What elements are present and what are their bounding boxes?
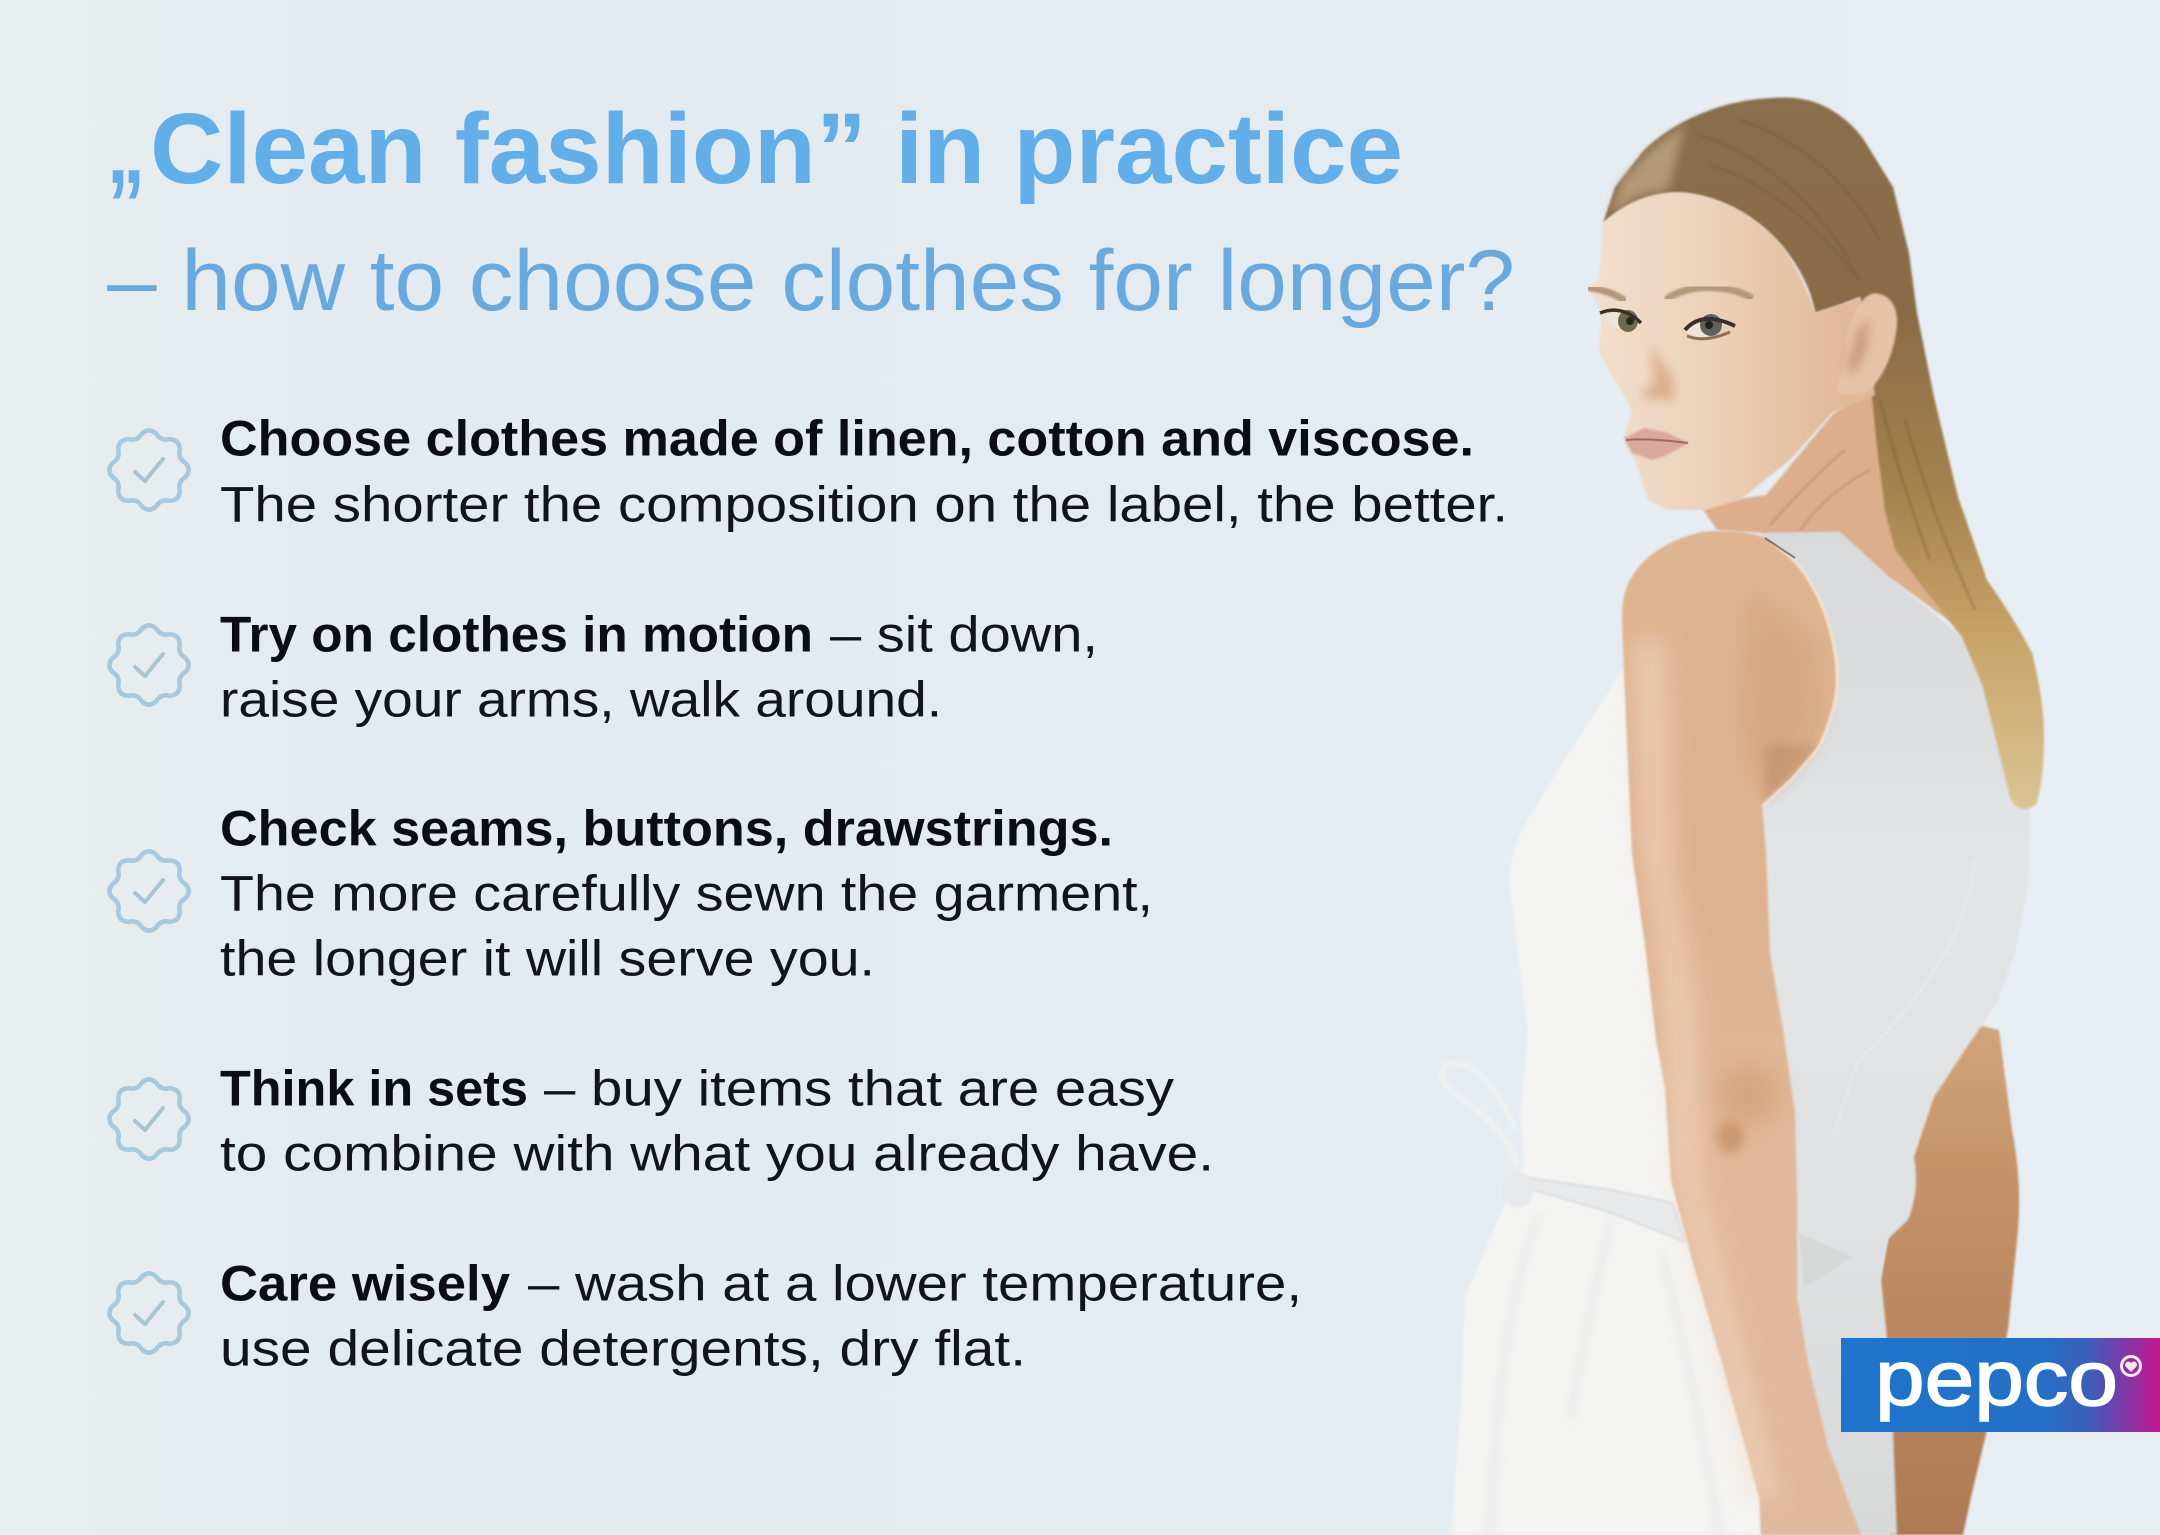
title: – how to choose clothes for longer? — [107, 233, 1515, 329]
logo: pepco: pepco — [1875, 1334, 2118, 1422]
icon: check badge 2 — [109, 625, 189, 705]
tip 3: Check seams, buttons, drawstrings. — [220, 800, 1113, 856]
mouth line — [1626, 439, 1688, 443]
tip 5: – wash at a lower temperature, — [528, 1256, 1302, 1312]
belt loop — [1442, 1063, 1518, 1165]
tip 5: Care wisely — [220, 1256, 510, 1312]
belt knot — [1503, 1172, 1533, 1208]
dress front panel — [1451, 670, 1770, 1535]
waist belt — [1522, 1177, 1685, 1242]
dress back seam — [1835, 860, 1975, 1130]
face — [1589, 193, 1875, 510]
tip 2 — [109, 606, 1098, 728]
right eye — [1685, 314, 1735, 339]
tip 3: The more carefully sewn the garment, — [220, 866, 1153, 922]
right arm — [1880, 1025, 2019, 1535]
right eyebrow — [1668, 287, 1750, 298]
dress back panel — [1700, 532, 2030, 1535]
title: „ — [107, 93, 145, 205]
tip 3 — [109, 800, 1153, 986]
tip 2: Try on clothes in motion — [220, 606, 813, 662]
title — [107, 93, 1515, 329]
tip 4: – buy items that are easy — [544, 1060, 1174, 1116]
arm shade — [1740, 590, 1820, 790]
neck tendon shadows — [1770, 450, 1870, 530]
tip 1: The shorter the composition on the label, the better. — [220, 476, 1508, 532]
tip 5 — [109, 1256, 1302, 1376]
icon: check badge 4 — [109, 1079, 189, 1159]
logo heart mark — [2122, 1356, 2140, 1376]
tip 5: use delicate detergents, dry flat. — [220, 1320, 1026, 1376]
icon: check badge 5 — [109, 1273, 189, 1353]
left eye — [1600, 310, 1641, 332]
hair — [1603, 97, 2044, 809]
left eyebrow — [1590, 288, 1624, 300]
front arm — [1622, 531, 1861, 1535]
icon: check badge 3 — [109, 851, 189, 931]
lips — [1624, 428, 1689, 460]
tip 4: to combine with what you already have. — [220, 1126, 1214, 1182]
elbow wrinkle — [1716, 1121, 1744, 1153]
logo: pepco — [1841, 1334, 2160, 1432]
tip 2: raise your arms, walk around. — [220, 672, 942, 728]
tip 2: – sit down, — [830, 606, 1098, 662]
neck — [1700, 385, 1962, 630]
nose shadow — [1640, 345, 1675, 400]
armpit shadow — [1764, 745, 1818, 803]
illustration: woman in white linen dress — [1442, 97, 2044, 1535]
hair front lock highlight — [1610, 125, 1685, 215]
armhole piping — [1763, 545, 1837, 806]
tip 1 — [109, 410, 1508, 532]
skirt folds — [1490, 1215, 1720, 1535]
dress back folded tie — [1799, 1233, 1852, 1287]
ear inner shadow — [1846, 318, 1870, 372]
strap dark edge — [1765, 538, 1795, 558]
hair strands — [1700, 120, 1975, 610]
tip 3: the longer it will serve you. — [220, 930, 875, 986]
arm highlight — [1632, 640, 1780, 1500]
ear — [1836, 293, 1897, 395]
tip 4: Think in sets — [220, 1060, 528, 1116]
tip 4 — [109, 1060, 1214, 1182]
elbow shading — [1718, 1065, 1778, 1125]
icon: check badge 1 — [109, 430, 189, 510]
title: Clean fashion” in practice — [150, 93, 1403, 205]
tip 1: Choose clothes made of linen, cotton and viscose. — [220, 410, 1474, 466]
